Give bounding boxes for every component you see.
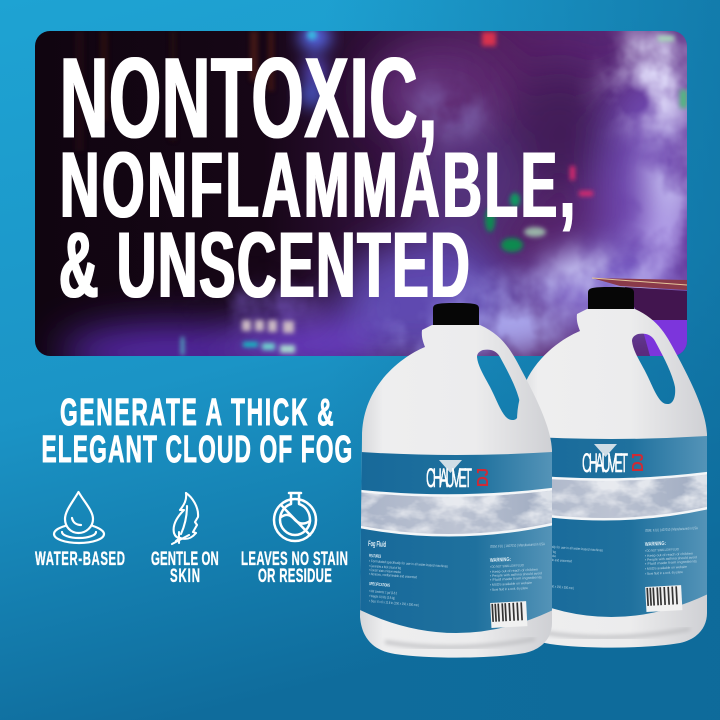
label: warning and barcode: • Keep out of reach of children [490, 567, 538, 574]
label: warning and barcode [490, 542, 545, 628]
label: warning and barcode: • DO NOT SWALLOW FLUID [490, 563, 524, 569]
label: warning and barcode: • Fluid made from ingredients [490, 575, 542, 582]
label: product details: • Size: 6 x 6 x 11.8 in (150 x 150 x 300 mm) [369, 599, 419, 607]
label: product details [368, 539, 448, 607]
back bottle: • MSDS available on website [645, 565, 687, 571]
stage rail and violet backdrop [592, 278, 687, 356]
bottle body [360, 325, 552, 658]
label: warning and barcode: WARNING: [490, 557, 511, 564]
subtitle: ELEGANT CLOUD OF FOG [42, 428, 352, 470]
back bottle: • Formulated specifically for use in all water-based machines [524, 543, 603, 553]
stage lights [181, 320, 295, 355]
back bottle: • Generates a thick cloud of fog [524, 548, 556, 554]
label: warning and barcode: ITEM: FJU | 1407010 | Manufactured in USA [490, 542, 545, 549]
icon: water drop [54, 492, 104, 543]
back bottle: DJ [630, 453, 647, 472]
back bottle: • DO NOT SWALLOW FLUID [645, 547, 679, 553]
photo panel: fog and stage lights [35, 24, 700, 378]
label: product details: • Generates a thick cloud of fog [369, 564, 401, 570]
back bottle: • Keep out of reach of children [645, 551, 693, 558]
title: NONTOXIC, [60, 34, 437, 162]
feature: gentle on skin: GENTLE ON [151, 549, 219, 570]
back bottle: • Fluid made from ingredients [645, 559, 697, 566]
feature: leaves no stain or residue [241, 493, 348, 587]
front bottle [360, 303, 553, 658]
title: & UNSCENTED [59, 213, 470, 318]
title [59, 34, 575, 318]
back bottle: • People with asthma should avoid [645, 555, 697, 562]
feature: leaves no stain or residue: LEAVES NO STAIN [241, 549, 348, 570]
back bottle [515, 287, 708, 648]
subtitle: GENERATE A THICK & [60, 391, 334, 433]
label: product details: FEATURES [369, 553, 381, 559]
label: warning and barcode: • People with asthma should avoid [490, 571, 542, 578]
brand logo [426, 460, 492, 493]
back bottle: ITEM: FJU | 1407010 | Manufactured in USA [645, 526, 698, 533]
bottle cap [433, 303, 479, 326]
feature: water-based [35, 492, 125, 570]
fog wisps [200, 30, 695, 360]
feature: gentle on skin [151, 493, 219, 587]
brand logo: CHAUVET [426, 464, 472, 493]
back bottle: WARNING: [645, 541, 666, 548]
label: warning and barcode: • MSDS available on website [490, 581, 532, 587]
label: product details: • Formulated specifically for use in all water-based machines [369, 559, 448, 569]
label: product details: • Nontoxic, nonflammable and unscented [369, 572, 417, 579]
back bottle: • Nontoxic, nonflammable and unscented [524, 556, 572, 563]
label: warning and barcode: • Store fluid in a cool, dry place [490, 586, 528, 592]
brand logo: DJ [475, 468, 492, 487]
label: product details: • Doesn't stain or leave residue [369, 568, 401, 574]
back bottle: • Store fluid in a cool, dry place [645, 570, 683, 576]
icon: feather [172, 493, 198, 544]
bottle label [360, 452, 553, 647]
feature: leaves no stain or residue: OR RESIDUE [258, 566, 332, 587]
feature: gentle on skin: SKIN [170, 566, 200, 587]
label: product details: SPECIFICATIONS [369, 581, 390, 588]
title: NONFLAMMABLE, [60, 133, 575, 238]
subtitle [42, 391, 352, 470]
label: product details: • Net contents: 1 gal (3.8 l) [369, 589, 397, 595]
label: product details: Fog Fluid [368, 539, 386, 549]
back bottle: • Doesn't stain or leave residue [524, 552, 556, 558]
back bottle: • Size: 6 x 6 x 11.8 in (150 x 150 x 300 mm) [524, 582, 574, 590]
icon: crossed-out flask [274, 493, 316, 541]
feature: water-based: WATER-BASED [35, 549, 125, 570]
back bottle: CHAUVET [582, 449, 628, 478]
label: product details: • Weight: 8.8 lbs (3.9 kg) [369, 594, 395, 600]
